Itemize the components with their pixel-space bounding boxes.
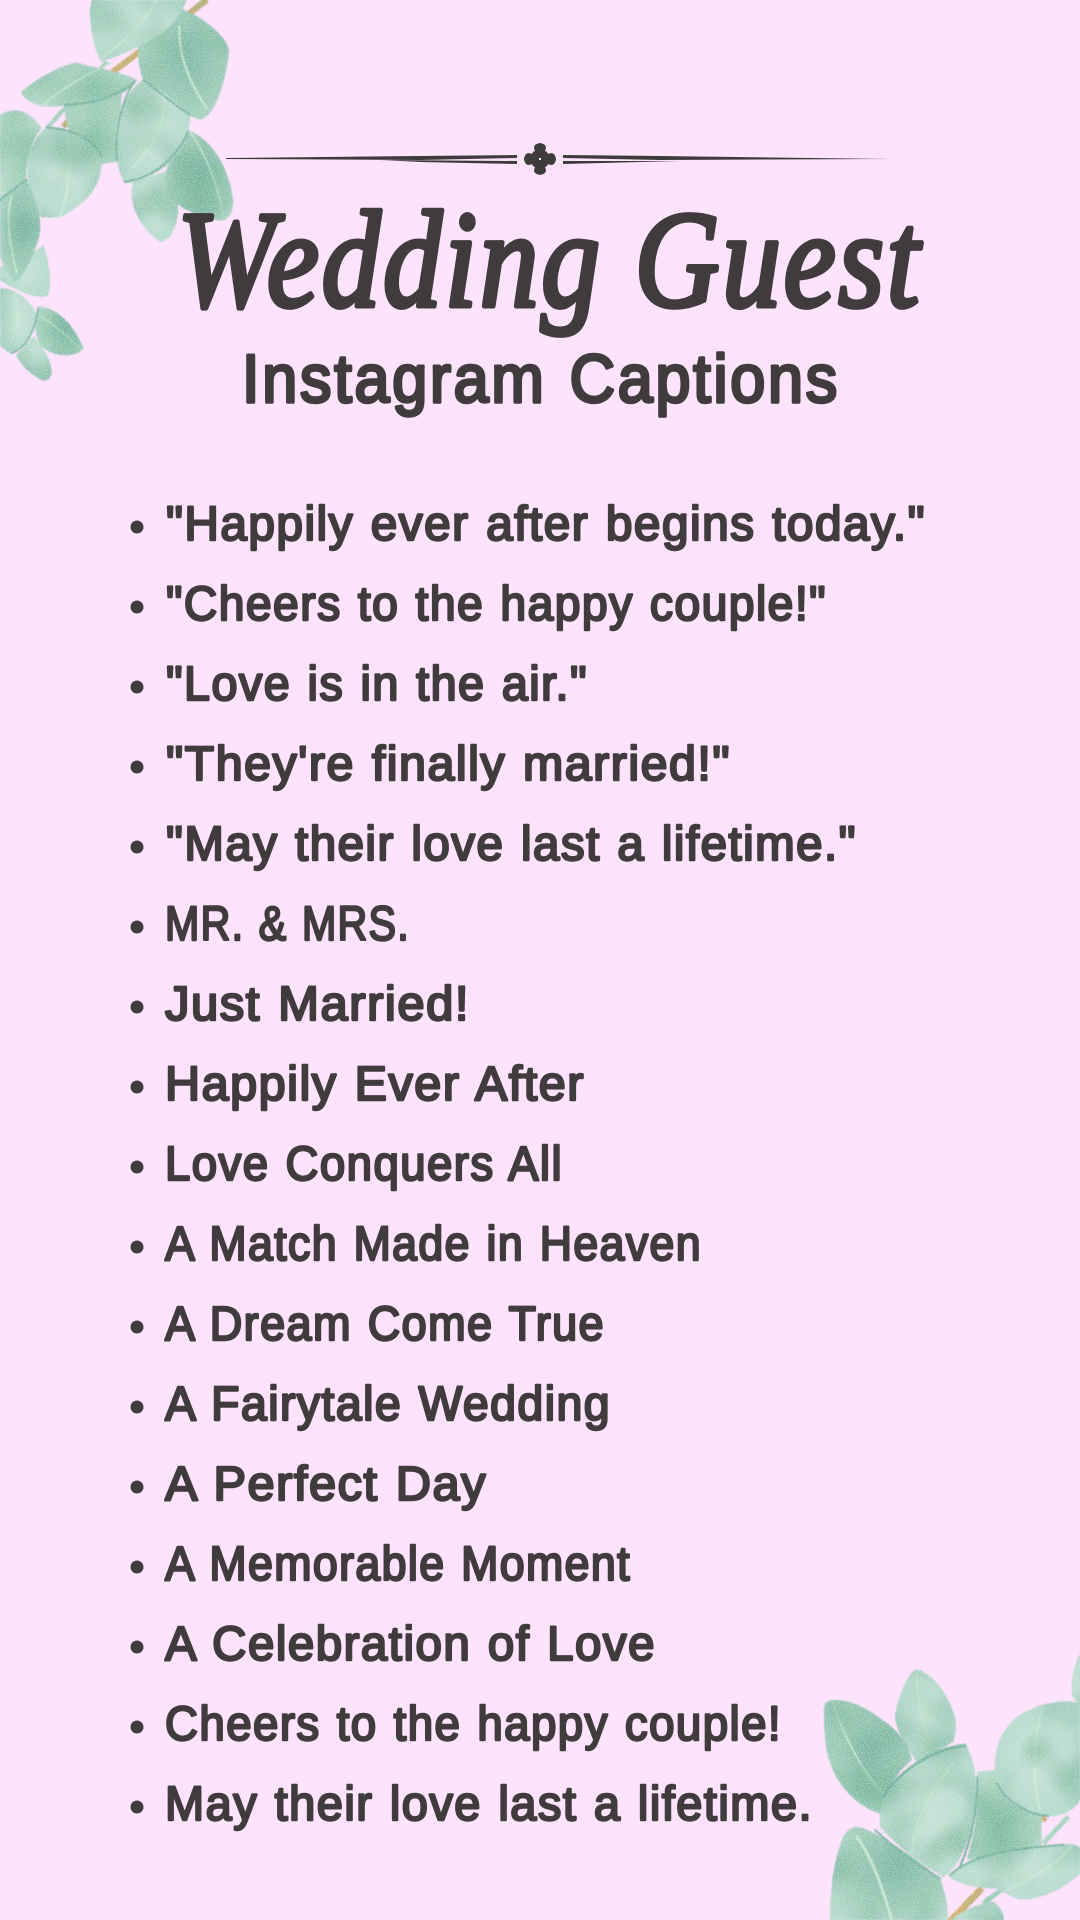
bullet list of captions: "They're finally married!" bbox=[166, 738, 731, 791]
bullet list of captions: Happily Ever After bbox=[165, 1058, 585, 1111]
bottom-right eucalyptus branch bbox=[824, 1653, 1080, 1920]
bullet list of captions: Cheers to the happy couple! bbox=[165, 1698, 782, 1751]
subtitle: Instagram Captions bbox=[242, 341, 840, 417]
bullet list of captions: "Love is in the air." bbox=[166, 658, 588, 711]
bullet list of captions: A Memorable Moment bbox=[165, 1538, 631, 1591]
bullet list of captions: "Happily ever after begins today." bbox=[166, 498, 926, 551]
bullet list of captions: Just Married! bbox=[165, 978, 470, 1031]
bullet list of captions: A Perfect Day bbox=[165, 1458, 487, 1511]
bullet list of captions: A Celebration of Love bbox=[165, 1618, 656, 1671]
bullet list of captions: "May their love last a lifetime." bbox=[166, 818, 857, 871]
bullet list of captions: "Cheers to the happy couple!" bbox=[166, 578, 827, 631]
bullet list of captions: A Match Made in Heaven bbox=[165, 1218, 702, 1271]
bullet list of captions: MR. & MRS. bbox=[165, 898, 410, 951]
bullet list of captions: May their love last a lifetime. bbox=[165, 1778, 813, 1831]
bullet list of captions bbox=[130, 498, 926, 1831]
title: Wedding Guest bbox=[177, 183, 923, 336]
bullet list of captions: Love Conquers All bbox=[165, 1138, 563, 1191]
bullet list of captions: A Fairytale Wedding bbox=[165, 1378, 611, 1431]
icon: cross flourish bbox=[524, 143, 556, 175]
bullet list of captions: A Dream Come True bbox=[165, 1298, 605, 1351]
top-left eucalyptus branch bbox=[0, 0, 233, 381]
ornament divider bbox=[226, 143, 891, 175]
